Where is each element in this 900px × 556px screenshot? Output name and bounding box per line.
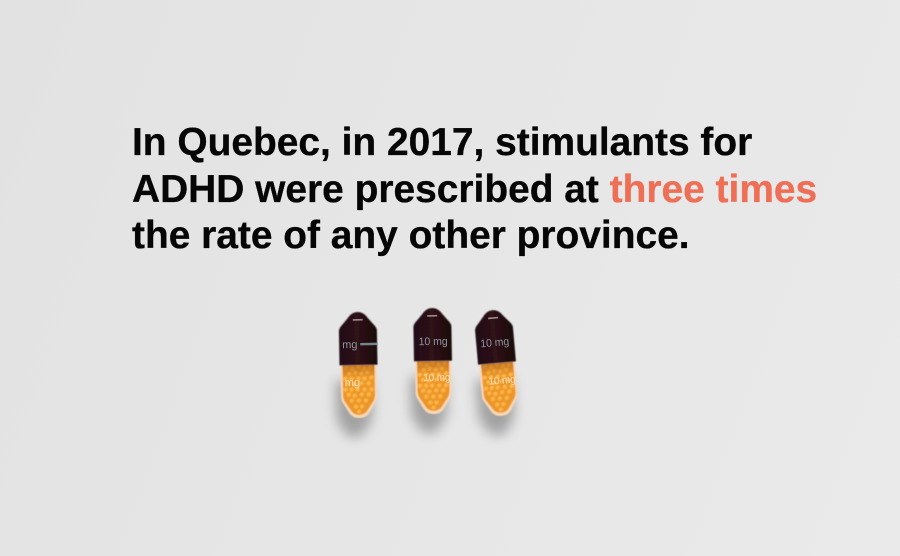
cap highlight [427, 315, 437, 317]
capsule 2 [409, 308, 453, 433]
dark cap [339, 312, 377, 365]
cap highlight [488, 317, 498, 319]
shadow [475, 378, 516, 437]
imprint on body: mg [345, 377, 360, 389]
headline: In Quebec, in 2017, stimulants for [132, 121, 752, 164]
imprint on body: 10 mg [488, 373, 516, 388]
imprint on cap: 10 mg [419, 336, 448, 348]
dark cap [413, 308, 452, 361]
headline: ADHD were prescribed at three times [132, 168, 817, 211]
imprint dash [360, 343, 377, 345]
capsule 1 [335, 312, 379, 437]
dark cap [473, 309, 516, 365]
capsule 3 [469, 309, 522, 437]
shadow [336, 381, 373, 437]
imprint on cap: mg [342, 339, 358, 351]
clear body with orange beads [414, 358, 453, 414]
capsule photo group [329, 307, 521, 443]
clear body with orange beads [478, 358, 521, 417]
cap highlight [353, 319, 363, 321]
clear body with orange beads [339, 362, 378, 418]
headline [132, 121, 817, 257]
imprint on cap: 10 mg [480, 336, 510, 350]
imprint on body: 10 mg [423, 372, 451, 384]
shadow [410, 377, 447, 433]
headline: the rate of any other province. [132, 214, 690, 257]
